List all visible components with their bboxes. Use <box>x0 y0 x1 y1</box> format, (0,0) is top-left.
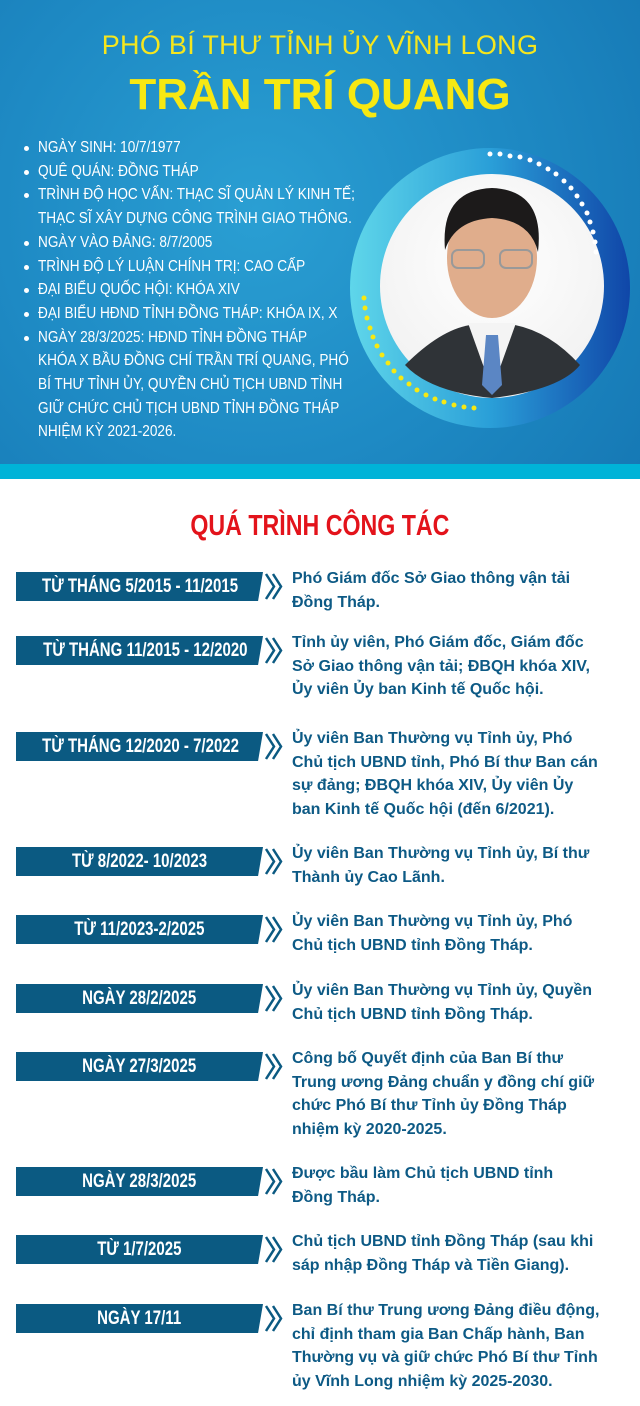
timeline row 7 <box>16 1050 594 1138</box>
bullet list: profile: THẠC SĨ XÂY DỰNG CÔNG TRÌNH GIAO THÔNG. <box>38 210 352 227</box>
text: Chủ tịch UBND tỉnh Đồng Tháp. <box>292 1006 533 1023</box>
timeline row 3 <box>16 728 598 818</box>
text: Trung ương Đảng chuẩn y đồng chí giữ <box>292 1074 594 1091</box>
timeline row 4 <box>16 844 590 886</box>
text: Ủy viên Ban Thường vụ Tỉnh ủy, Phó <box>292 730 572 747</box>
text: TỪ 11/2023-2/2025 <box>74 919 205 940</box>
text: NGÀY 27/3/2025 <box>82 1056 197 1077</box>
text: Ban Bí thư Trung ương Đảng điều động, <box>292 1302 599 1319</box>
bullet list: profile: NGÀY VÀO ĐẢNG: 8/7/2005 <box>38 234 212 251</box>
section heading: QUÁ TRÌNH CÔNG TÁC <box>190 510 450 542</box>
text: TỪ 1/7/2025 <box>97 1239 182 1260</box>
bullet list: profile: KHÓA X BẦU ĐỒNG CHÍ TRẦN TRÍ QUANG, PHÓ <box>38 352 349 369</box>
text: Đồng Tháp. <box>292 1189 380 1206</box>
bullet list: profile: BÍ THƯ TỈNH ỦY, QUYỀN CHỦ TỊCH UBND TỈNH <box>38 376 342 393</box>
timeline row 5 <box>16 912 572 954</box>
text: Công bố Quyết định của Ban Bí thư <box>292 1050 563 1067</box>
text: NGÀY 28/2/2025 <box>82 988 197 1009</box>
text: Đồng Tháp. <box>292 594 380 611</box>
text: NGÀY 17/11 <box>97 1308 181 1329</box>
text: Thành ủy Cao Lãnh. <box>292 869 445 886</box>
timeline row 10 <box>16 1302 599 1390</box>
timeline row 9 <box>16 1233 593 1274</box>
text: NGÀY 28/3/2025 <box>82 1171 197 1192</box>
text: TỪ THÁNG 11/2015 - 12/2020 <box>43 640 248 661</box>
bullet list: profile: NHIỆM KỲ 2021-2026. <box>38 423 176 440</box>
cyan band <box>0 464 640 479</box>
title: position: PHÓ BÍ THƯ TỈNH ỦY VĨNH LONG <box>102 30 538 60</box>
timeline row 6 <box>16 980 592 1023</box>
dots arcs <box>488 152 598 254</box>
portrait circle <box>350 148 630 428</box>
text: sự đảng; ĐBQH khóa XIV, Ủy viên Ủy <box>292 777 573 794</box>
text: Ủy viên Ban Thường vụ Tỉnh ủy, Phó <box>292 913 572 930</box>
text: sáp nhập Đồng Tháp và Tiền Giang). <box>292 1257 569 1274</box>
timeline row 2 <box>16 634 590 698</box>
bullet list: profile: QUÊ QUÁN: ĐỒNG THÁP <box>38 163 199 180</box>
bullet list: profile: ĐẠI BIỂU QUỐC HỘI: KHÓA XIV <box>38 281 240 298</box>
bullet list: profile: TRÌNH ĐỘ LÝ LUẬN CHÍNH TRỊ: CAO CẤP <box>38 258 305 275</box>
bullet list: profile <box>24 138 355 440</box>
text: TỪ THÁNG 12/2020 - 7/2022 <box>42 736 239 757</box>
text: Chủ tịch UBND tỉnh Đồng Tháp. <box>292 937 533 954</box>
title: name: TRẦN TRÍ QUANG <box>129 70 511 119</box>
text: Tỉnh ủy viên, Phó Giám đốc, Giám đốc <box>292 634 584 651</box>
bullet list: profile: NGÀY SINH: 10/7/1977 <box>38 139 181 156</box>
bullet list: profile: ĐẠI BIỂU HĐND TỈNH ĐỒNG THÁP: KHÓA IX, X <box>38 305 338 322</box>
bullet list: profile: GIỮ CHỨC CHỦ TỊCH UBND TỈNH ĐỒNG THÁP <box>38 400 339 417</box>
header panel <box>0 0 640 466</box>
person figure <box>405 188 580 398</box>
text: Thường vụ và giữ chức Phó Bí thư Tỉnh <box>292 1349 598 1366</box>
text: Chủ tịch UBND tỉnh, Phó Bí thư Ban cán <box>292 754 598 771</box>
text: ban Kinh tế Quốc hội (đến 6/2021). <box>292 801 554 818</box>
text: Ủy viên Ủy ban Kinh tế Quốc hội. <box>292 681 544 698</box>
text: Được bầu làm Chủ tịch UBND tỉnh <box>292 1165 553 1182</box>
text: TỪ 8/2022- 10/2023 <box>72 851 207 872</box>
timeline row 1 <box>16 570 570 611</box>
text: chức Phó Bí thư Tỉnh ủy Đồng Tháp <box>292 1097 567 1114</box>
bullet list: profile: NGÀY 28/3/2025: HĐND TỈNH ĐỒNG THÁP <box>38 329 307 346</box>
text: Ủy viên Ban Thường vụ Tỉnh ủy, Quyền <box>292 982 592 999</box>
text: Phó Giám đốc Sở Giao thông vận tải <box>292 570 570 587</box>
bullet list: profile: TRÌNH ĐỘ HỌC VẤN: THẠC SĨ QUẢN LÝ KINH TẾ; <box>38 186 355 203</box>
timeline row 8 <box>16 1165 553 1206</box>
text: TỪ THÁNG 5/2015 - 11/2015 <box>42 576 238 597</box>
text: chỉ định tham gia Ban Chấp hành, Ban <box>292 1326 584 1343</box>
text: ủy Vĩnh Long nhiệm kỳ 2025-2030. <box>292 1373 553 1390</box>
text: nhiệm kỳ 2020-2025. <box>292 1121 447 1138</box>
text: Sở Giao thông vận tải; ĐBQH khóa XIV, <box>292 658 590 675</box>
text: Chủ tịch UBND tỉnh Đồng Tháp (sau khi <box>292 1233 593 1250</box>
text: Ủy viên Ban Thường vụ Tỉnh ủy, Bí thư <box>292 845 589 862</box>
